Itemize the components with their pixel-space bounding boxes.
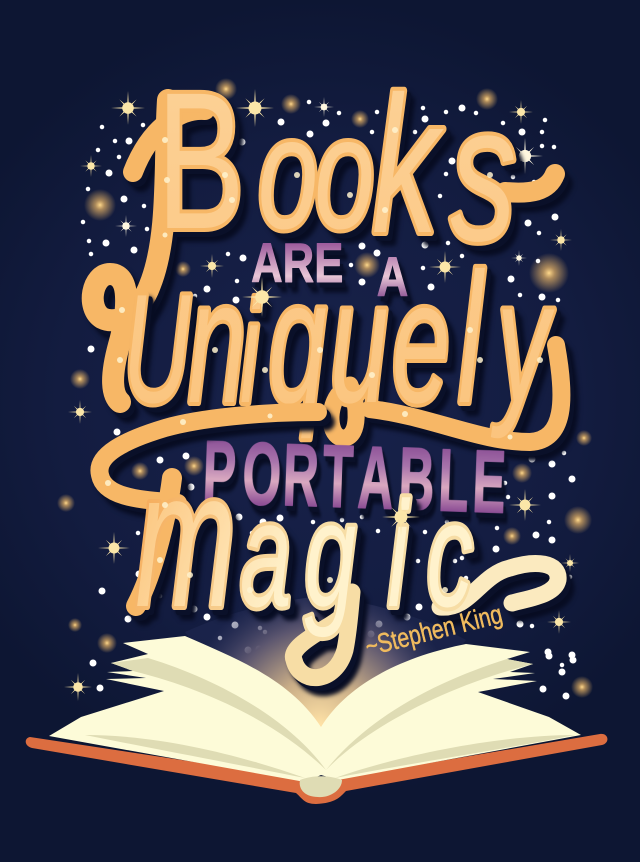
word: Uniquely (123, 236, 561, 442)
foreground stars (242, 277, 420, 536)
word: Uniquely: y (490, 243, 555, 440)
flourish: y tail (370, 345, 561, 442)
right page (321, 644, 581, 780)
sparkle stars (64, 89, 579, 701)
word: magic (99, 412, 558, 678)
flourish: m lead stem (136, 478, 172, 606)
hand lettered quote (93, 53, 561, 678)
word: Uniquely: ue (330, 243, 450, 440)
book cover (26, 734, 607, 804)
attribution: Stephen King: ~Stephen King (362, 599, 505, 662)
flourish: s tail (505, 174, 555, 193)
word: Books: k (372, 57, 444, 274)
word: magic: ag (240, 471, 356, 638)
word: Books: oo (258, 83, 375, 262)
open book (26, 636, 607, 804)
scattered white dots (83, 102, 573, 696)
word: Uniquely: U (123, 263, 191, 436)
word: Uniquely: l (458, 236, 485, 442)
word: magic: i (387, 471, 411, 638)
flourish: g loop (293, 592, 352, 678)
glowing lights (57, 78, 593, 698)
page shadows (85, 658, 575, 797)
flourish: B tail (93, 100, 168, 402)
word: Uniquely: q (268, 243, 327, 440)
word: Uniquely: n (188, 243, 246, 440)
light rising from book (185, 596, 466, 745)
words: ARE A: A (377, 246, 408, 308)
word: magic: c (427, 471, 473, 638)
flourish: long swash into m (99, 412, 318, 503)
word: Books: B (156, 53, 245, 270)
words: ARE A: ARE (251, 232, 355, 294)
word: Uniquely: i (240, 272, 262, 434)
left page (49, 636, 321, 782)
sparkle dots on lettering (105, 127, 543, 593)
flourish: c tail (440, 564, 558, 607)
flourish: q loop (331, 385, 356, 438)
word: PORTABLE: PORTABLE (201, 423, 507, 532)
word: magic: m (135, 431, 236, 648)
word: Books: s (450, 65, 516, 282)
flourish: B arm (133, 110, 205, 172)
word: Books (93, 53, 555, 402)
